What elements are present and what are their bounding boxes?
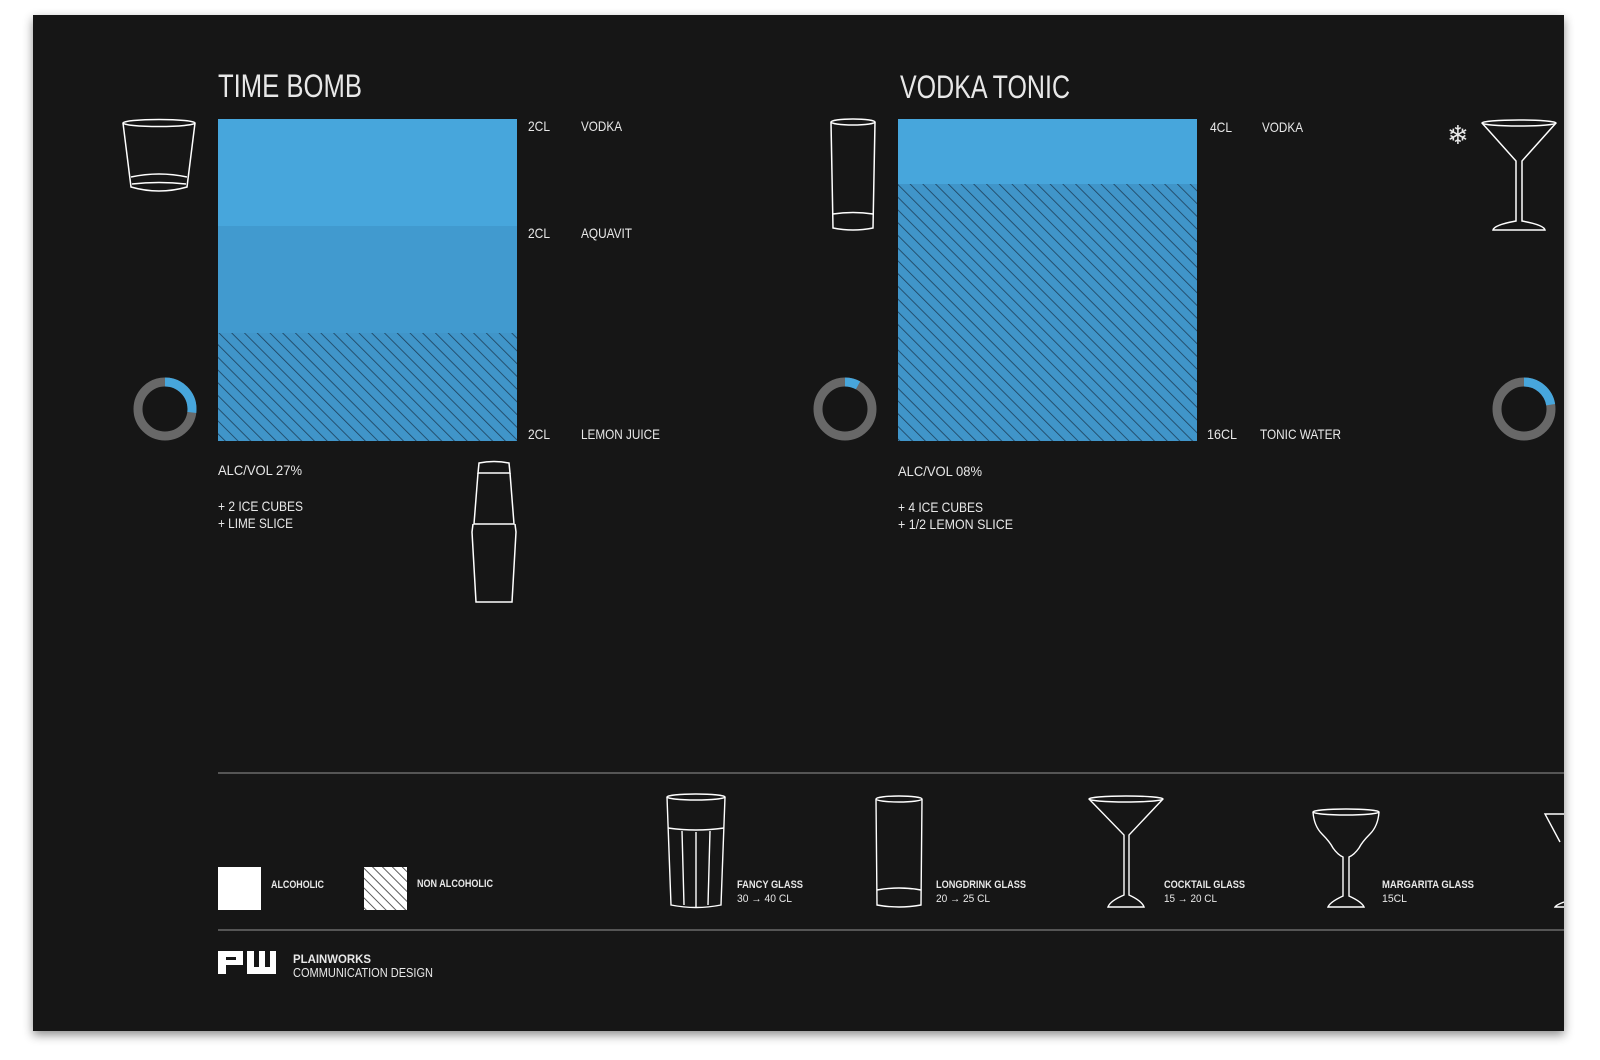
- text: time bomb details: + LIME SLICE: [218, 515, 293, 531]
- legend: alcoholic: [218, 867, 324, 910]
- text: vodka tonic details: + 1/2 LEMON SLICE: [898, 516, 1013, 532]
- glass key: cocktail glass: COCKTAIL GLASS: [1164, 879, 1245, 891]
- labels: vodka tonic ingredients: 16CL: [1207, 426, 1237, 442]
- chart: time bomb stacked bar: [218, 119, 517, 441]
- glass key: margarita glass: 15CL: [1382, 893, 1407, 905]
- donut: time bomb alcohol 27%: [138, 382, 192, 436]
- icon: cocktail glass: [1482, 120, 1556, 230]
- text: vodka tonic details: [898, 463, 1013, 532]
- glass key: fancy glass: FANCY GLASS: [737, 879, 803, 891]
- text: vodka tonic details: ALC/VOL 08%: [898, 463, 982, 479]
- labels: vodka tonic ingredients: TONIC WATER: [1260, 426, 1341, 442]
- icon: highball glass: [831, 119, 875, 230]
- text: plainworks: [293, 952, 433, 980]
- legend: non alcoholic: [364, 867, 493, 910]
- labels: time bomb ingredients: AQUAVIT: [581, 225, 632, 241]
- text: plainworks: PLAINWORKS: [293, 952, 371, 966]
- text: time bomb details: [218, 462, 303, 531]
- glass key: cocktail glass: 15 → 20 CL: [1164, 893, 1217, 905]
- icon: old fashioned glass: [123, 120, 195, 191]
- chart: vodka tonic stacked bar: [898, 119, 1197, 441]
- glass key: fancy glass: 30 → 40 CL: [737, 893, 792, 905]
- labels: vodka tonic ingredients: 4CL: [1210, 119, 1232, 135]
- labels: time bomb ingredients: 2CL: [528, 118, 550, 134]
- legend: non alcoholic: NON ALCOHOLIC: [417, 878, 493, 890]
- title: vodka tonic: VODKA TONIC: [900, 69, 1070, 105]
- text: plainworks: COMMUNICATION DESIGN: [293, 966, 433, 980]
- glass key: margarita glass: MARGARITA GLASS: [1382, 879, 1474, 891]
- labels: time bomb ingredients: 2CL: [528, 225, 550, 241]
- legend: alcoholic: ALCOHOLIC: [271, 879, 324, 891]
- text: vodka tonic details: + 4 ICE CUBES: [898, 499, 983, 515]
- glass key: cocktail glass: [1089, 796, 1245, 907]
- divider lines: [218, 772, 1564, 774]
- donut: third cocktail: [1497, 382, 1551, 436]
- labels: vodka tonic ingredients: VODKA: [1262, 119, 1304, 135]
- icon: shaker: [472, 462, 516, 602]
- labels: time bomb ingredients: 2CL: [528, 426, 550, 442]
- glass key: longdrink glass: LONGDRINK GLASS: [936, 879, 1026, 891]
- glass key: fancy glass: [667, 794, 803, 908]
- text: time bomb details: ALC/VOL 27%: [218, 462, 302, 478]
- labels: vodka tonic ingredients: [1207, 119, 1341, 442]
- text: time bomb details: + 2 ICE CUBES: [218, 498, 303, 514]
- labels: time bomb ingredients: VODKA: [581, 118, 623, 134]
- labels: time bomb ingredients: [528, 118, 660, 442]
- logo: PW: [218, 951, 276, 974]
- labels: time bomb ingredients: LEMON JUICE: [581, 426, 660, 442]
- donut: vodka tonic alcohol 8%: [818, 382, 872, 436]
- glass key: margarita glass: [1313, 809, 1474, 907]
- title: time bomb: TIME BOMB: [218, 68, 362, 104]
- glass key: partial glass (clipped): [1545, 814, 1564, 907]
- icon: snowflake: ❄: [1447, 120, 1469, 150]
- glass key: longdrink glass: [876, 796, 1026, 907]
- glass key: longdrink glass: 20 → 25 CL: [936, 893, 990, 905]
